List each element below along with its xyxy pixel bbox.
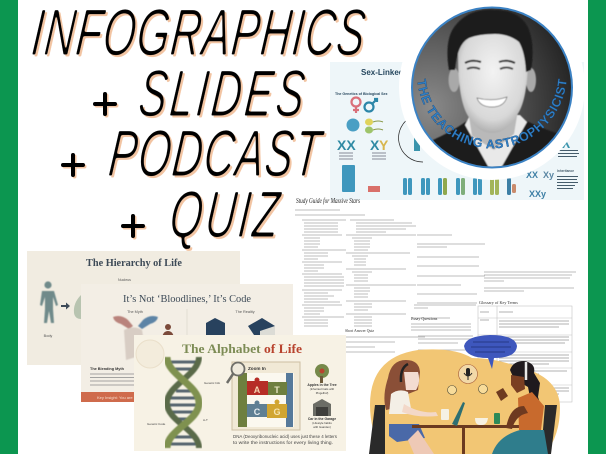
nucleus label: Nucleus: [118, 278, 131, 282]
icon: person silhouette: [162, 324, 174, 338]
ring text: THE TEACHING ASTROPHYSICIST: [417, 78, 566, 148]
yellow backdrop: [370, 349, 560, 454]
panel: slide alphabet of life: [134, 335, 346, 451]
mouth: [477, 97, 507, 107]
key insight text: Key Insight: You are: [97, 395, 133, 400]
puzzle piece A: A: [254, 385, 261, 395]
slide title: The Alphabet of Life: [182, 341, 302, 356]
essay heading: Essay Questions: [411, 316, 438, 321]
puzzle piece G: G: [273, 407, 281, 417]
right chair: [543, 405, 557, 454]
section heading: genetics: The Genetics of Biological Sex: [335, 92, 388, 96]
lens outline: [399, 116, 423, 162]
icon: microphone badge: [458, 364, 478, 384]
zoom in label: Zoom In: [248, 366, 266, 371]
blue ring: [411, 6, 573, 168]
icon: magnifying glass: [227, 362, 244, 383]
question text columns: [295, 210, 576, 352]
label: car in the garage: with Guarden): [313, 425, 331, 429]
label: apples in the tree: Apples in the Tree: [307, 383, 337, 387]
inheritance note: Inheritance: [557, 169, 574, 173]
coffee stain: [136, 340, 164, 368]
left chair: [369, 405, 385, 454]
skirt: [389, 424, 425, 442]
icon: teal ribbon: [562, 140, 570, 148]
study guide heading: Study Guide for Massive Stars: [296, 198, 360, 205]
glossary heading: Glossary of Key Terms: [479, 300, 518, 305]
icon: small red block: [368, 186, 380, 192]
puzzle piece C: C: [254, 407, 261, 417]
photo: [410, 5, 574, 170]
icon: garage: [313, 399, 331, 416]
bowl: [475, 418, 488, 425]
short answer heading: Short Answer Quiz: [345, 329, 374, 333]
label: apples in the tree: Pingelhof): [316, 391, 328, 395]
table: [412, 425, 524, 428]
chromosome letters, right column: Xy: [543, 170, 554, 180]
puzzle piece T: T: [274, 385, 280, 395]
title shadow: QUIZ: [169, 180, 287, 253]
tablet: [452, 402, 465, 426]
chromosome letters XX XY: X: [370, 137, 380, 153]
ladder rails: [238, 373, 247, 427]
icon: chromosome door: [342, 165, 355, 192]
chromosome letters, right column: [526, 170, 554, 199]
arm: [402, 404, 438, 416]
icon: egg and sperm: [346, 118, 383, 134]
label: apples in the tree: [307, 383, 337, 395]
green right border: [588, 0, 606, 454]
mug: [441, 409, 449, 420]
arm: [506, 406, 528, 429]
column label myth: The Myth: [127, 310, 143, 314]
title text: SLIDES: [136, 57, 308, 130]
eyes: [467, 68, 513, 69]
icon: body figure: [40, 281, 58, 323]
green left border: [0, 0, 18, 454]
annotation: genetic code: Genetic Code: [147, 422, 166, 426]
key insight bar: [81, 392, 136, 402]
hair: [510, 361, 540, 401]
panel: glossary table: [478, 300, 572, 402]
icon: dark house block: [206, 318, 225, 335]
plus signs: [64, 96, 144, 238]
annotation: base pair note: A-T: [203, 418, 208, 422]
body label: Body: [44, 334, 52, 338]
chromosome letters XX XY: XX: [337, 137, 356, 153]
white halo: [399, 0, 585, 180]
title text: PODCAST: [106, 117, 327, 190]
trousers: [492, 430, 548, 454]
eyebrows: [465, 61, 515, 63]
title shadow: PODCAST: [108, 119, 329, 192]
icon: sex symbols: [352, 98, 377, 113]
title text: QUIZ: [167, 178, 285, 251]
hand: [496, 388, 508, 401]
slide title: The Hierarchy of Life: [86, 258, 183, 269]
panel: study guide: [295, 198, 576, 353]
inheritance note: [557, 150, 579, 189]
bubble text lines: [471, 342, 511, 352]
caption: DNA (Deoxyribonucleic acid) uses just these 4 letters: [233, 434, 337, 439]
icon: dna helix: [167, 357, 200, 448]
shirt: [465, 115, 527, 168]
green bottle: [494, 413, 500, 424]
panel: slide hierarchy of life: [27, 251, 240, 365]
slide title: It’s Not ‘Bloodlines,’ It’s Code: [123, 293, 251, 305]
speech bubble: [464, 335, 517, 369]
illustration: podcast conversation: [369, 349, 560, 454]
face: [404, 372, 419, 390]
ears: [448, 68, 460, 92]
hair: [447, 10, 533, 72]
chromosome letters, right column: XX: [526, 170, 538, 180]
title text: [29, 0, 369, 251]
icon: cell: [74, 295, 81, 319]
top: [518, 392, 544, 430]
chromosome captions: [339, 153, 386, 159]
column label reality: The Reality: [235, 310, 255, 314]
table grid: [478, 306, 572, 402]
suit: [433, 121, 556, 166]
panel: zoom in frame: [232, 362, 300, 430]
caption: to write the instructions for every living thing.: [233, 440, 333, 445]
infographic heading: Sex-Linked: [361, 68, 404, 77]
portrait badge: [399, 6, 584, 180]
headphone: [525, 362, 527, 380]
face: [458, 27, 528, 133]
karyotype chromosomes row: [403, 178, 516, 195]
person right: [492, 361, 548, 454]
chromosome letters XX XY: Y: [379, 137, 389, 153]
title shadow: [31, 0, 371, 253]
panel: slide bloodlines: [81, 284, 293, 402]
table text: [480, 312, 569, 394]
hair: [384, 360, 420, 410]
panel: sex-linked infographic: [330, 62, 584, 200]
legs: [408, 430, 434, 454]
chromosome letters, right column: XXy: [529, 189, 546, 199]
divider: [186, 309, 188, 339]
label: car in the garage: [308, 417, 336, 429]
caption heading: The Blending Myth: [90, 367, 125, 371]
title: [29, 0, 371, 253]
icon: apple tree: [315, 364, 329, 383]
label: apples in the tree: (Inherited traits with: [310, 387, 335, 391]
neck: [469, 116, 518, 150]
face: [511, 375, 525, 393]
label: car in the garage: Car in the Garage: [308, 417, 336, 421]
arrow: [61, 302, 70, 310]
icon: dna block: [248, 318, 275, 335]
annotation: genetic info: Genetic Info: [204, 381, 221, 385]
icon: reaction circles: [448, 384, 488, 394]
caption: [233, 434, 337, 445]
shirt: [389, 390, 412, 414]
person left: [384, 360, 438, 454]
icon: mixing blood vials: [113, 316, 158, 360]
chromosome letters XX XY: [337, 137, 389, 153]
headphones: [401, 364, 408, 382]
label: car in the garage: (Lifestyle habits: [312, 421, 332, 425]
title shadow: SLIDES: [138, 59, 310, 132]
essay lines: [411, 324, 473, 353]
icon: test tube: [414, 135, 420, 151]
caption lines: [90, 374, 134, 385]
